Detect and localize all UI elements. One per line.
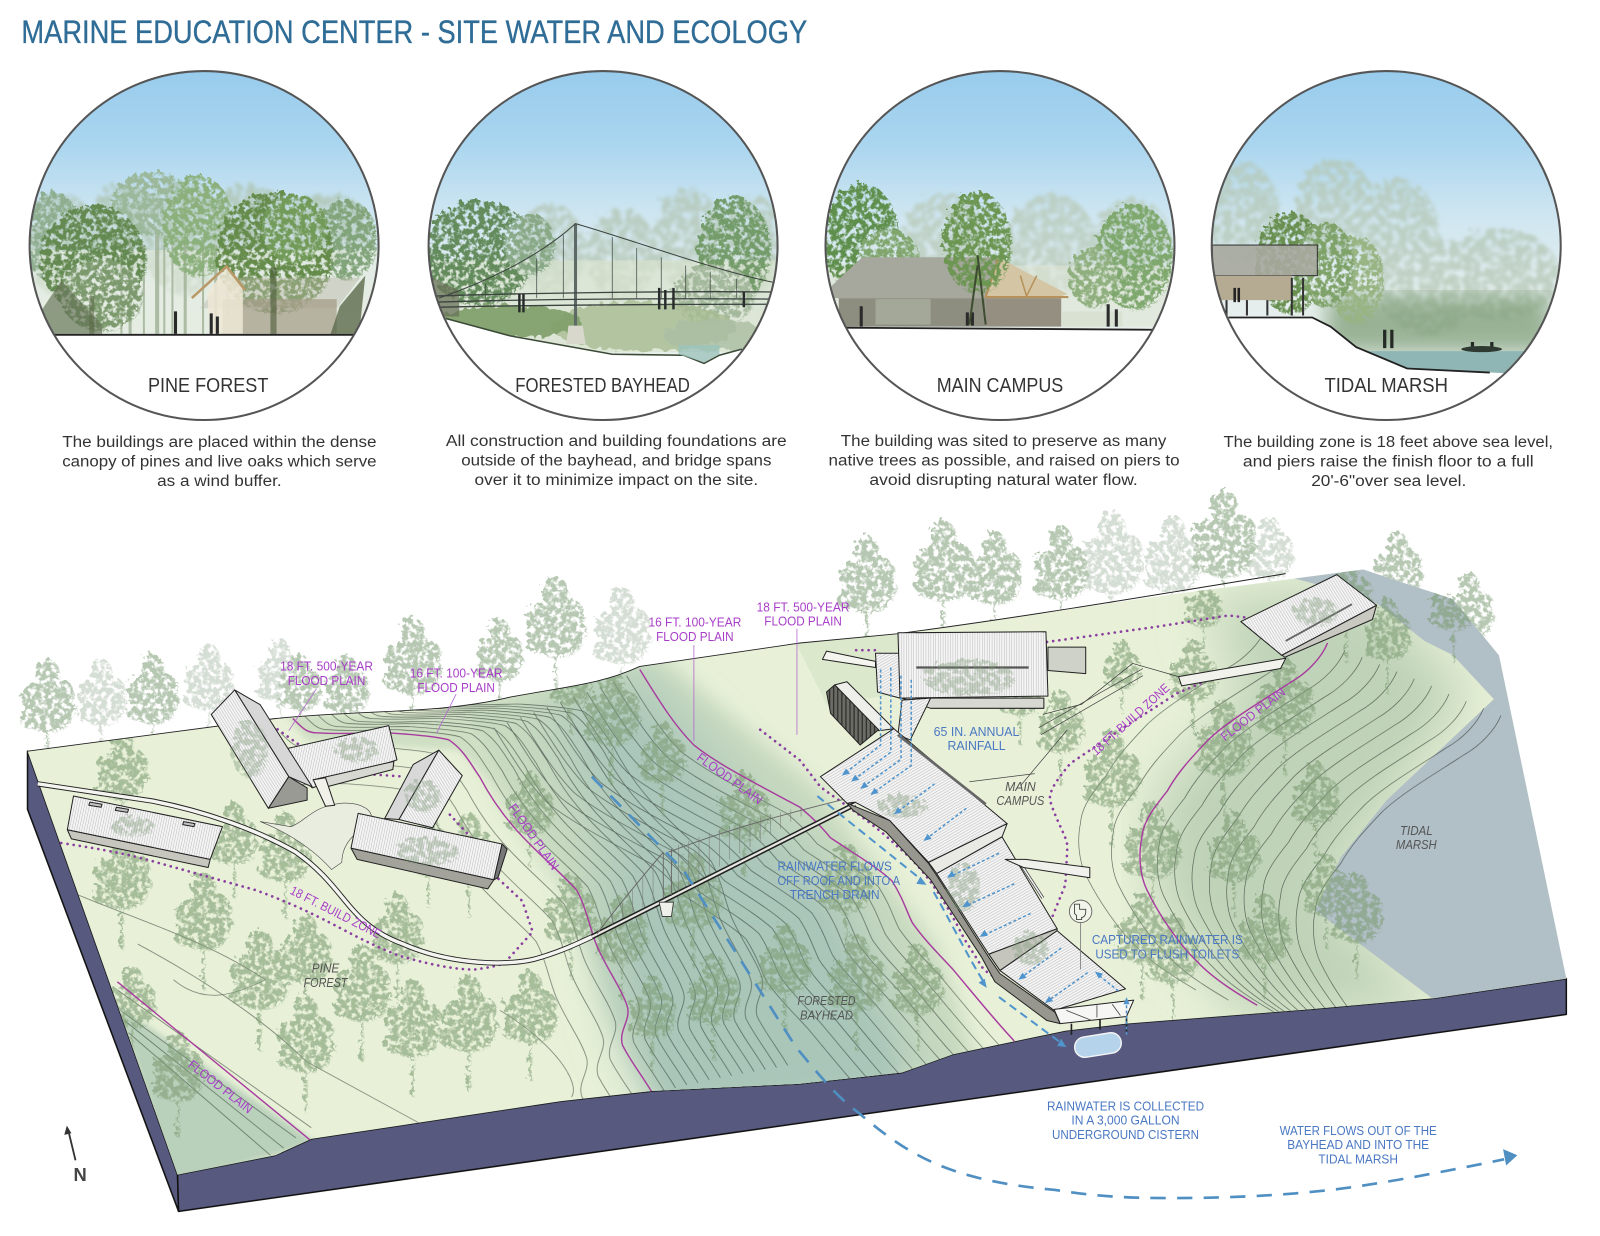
zone name labels: FORESTED xyxy=(797,993,856,1008)
blue water callouts: 65 IN. ANNUAL xyxy=(934,724,1019,739)
zone name labels: MAIN xyxy=(1005,779,1036,794)
ground cut xyxy=(848,328,1151,419)
blue water callouts xyxy=(778,724,1437,1166)
site model: terrain surface xyxy=(0,551,1600,1204)
text block: forested bayhead: over it to minimize impact on the site. xyxy=(474,472,758,489)
text block: main campus: avoid disrupting natural water flow. xyxy=(869,472,1138,489)
panel: forested bayhead vignette xyxy=(418,61,786,429)
circle outline xyxy=(1212,71,1561,420)
blue water callouts: RAINFALL xyxy=(947,738,1006,753)
main campus building xyxy=(832,257,1122,327)
purple flood plain labels: 18 FT. BUILD ZONE xyxy=(1088,680,1173,758)
panel: main campus vignette xyxy=(816,61,1184,429)
text block: main campus: The building was sited to preserve as many xyxy=(841,433,1166,450)
zone name labels: TIDAL xyxy=(1400,823,1433,838)
bridge cables xyxy=(597,798,849,934)
building: west lodge xyxy=(67,796,222,867)
zone name labels: CAMPUS xyxy=(996,793,1045,808)
purple flood plain labels: FLOOD PLAIN xyxy=(185,1057,256,1116)
purple flood plain labels: FLOOD PLAIN xyxy=(417,680,495,695)
north arrow xyxy=(64,1126,87,1185)
text block: tidal marsh xyxy=(1223,434,1553,490)
icon: toilet in circle xyxy=(1069,900,1092,970)
blue water callouts: CAPTURED RAINWATER IS xyxy=(1092,932,1243,947)
blue water callouts: TRENCH DRAIN xyxy=(790,887,880,902)
purple flood plain labels: 18 FT. 500-YEAR xyxy=(757,599,849,614)
panel: pine forest vignette xyxy=(20,61,388,429)
trench drain flow arrows xyxy=(817,796,1061,1043)
purple flood plain labels: 18 FT. BUILD ZONE xyxy=(288,883,384,941)
ground cut xyxy=(1229,318,1504,419)
text block: tidal marsh: 20'-6"over sea level. xyxy=(1311,473,1466,490)
title: MARINE EDUCATION CENTER - SITE WATER AND ECOLOGY xyxy=(21,13,807,50)
tidal marsh water xyxy=(1276,566,1571,1000)
purple flood plain labels: FLOOD PLAIN xyxy=(764,614,842,629)
zone name labels: MARSH xyxy=(1396,837,1437,852)
purple flood plain labels: FLOOD PLAIN xyxy=(288,673,365,688)
purple flood plain labels: FLOOD PLAIN xyxy=(506,801,562,873)
zone name labels: FOREST xyxy=(304,975,348,990)
text block: pine forest: The buildings are placed within the dense xyxy=(62,434,377,451)
blue water callouts: OFF ROOF AND INTO A xyxy=(778,873,900,888)
site model: front and side faces xyxy=(28,751,1566,1211)
building: northwest L-shaped hall xyxy=(211,690,397,808)
panel: tidal marsh vignette xyxy=(1204,61,1571,429)
suspension bridge xyxy=(434,224,776,327)
blue water callouts: RAINWATER FLOWS xyxy=(778,859,892,874)
ground cut xyxy=(56,336,352,419)
driveway pad xyxy=(260,803,372,870)
text block: forested bayhead xyxy=(446,433,787,489)
rainwater roof flow arrows xyxy=(846,667,1127,1035)
flood plain lines xyxy=(117,643,1328,1141)
trench drain arrowheads xyxy=(916,877,1066,1047)
label: forested bayhead: FORESTED BAYHEAD xyxy=(515,375,690,397)
purple flood plain labels: 18 FT. 500-YEAR xyxy=(280,659,373,674)
text block: main campus: native trees as possible, and raised on piers to xyxy=(829,452,1180,469)
label: tidal marsh: TIDAL MARSH xyxy=(1324,375,1448,397)
purple flood plain labels xyxy=(185,599,1288,1116)
building: long diagonal classroom wing xyxy=(820,682,1134,1035)
terrain colour zones xyxy=(117,582,1469,1184)
text block: forested bayhead: All construction and building foundations are xyxy=(446,433,787,450)
ground cut xyxy=(446,318,742,419)
purple flood plain labels: 16 FT. 100-YEAR xyxy=(648,615,741,630)
building: east pavilion xyxy=(1179,575,1377,686)
zone name labels: BAYHEAD xyxy=(800,1008,853,1023)
blue water callouts: RAINWATER IS COLLECTED xyxy=(1047,1098,1204,1113)
tree shadows over roofs xyxy=(110,598,1339,965)
roof flow arrowheads xyxy=(842,769,1130,1004)
road and suspension bridge xyxy=(38,784,855,963)
zone name labels xyxy=(304,779,1437,1023)
circle outline xyxy=(30,71,379,420)
terrain outline xyxy=(28,574,1286,751)
zone name labels: PINE xyxy=(312,961,340,976)
blue water callouts: BAYHEAD AND INTO THE xyxy=(1287,1137,1429,1152)
building: main campus hall xyxy=(822,632,1179,786)
label: pine forest: PINE FOREST xyxy=(148,375,268,397)
text block: pine forest: canopy of pines and live oaks which serve xyxy=(62,453,377,470)
circle outline xyxy=(429,71,778,420)
trees on terrain xyxy=(93,557,1479,1138)
building: central T-shaped hall xyxy=(351,750,507,889)
raised pavilion on piers xyxy=(1212,245,1317,315)
north arrow: N xyxy=(73,1164,87,1185)
purple flood plain labels: FLOOD PLAIN xyxy=(694,750,766,807)
main building facade xyxy=(41,266,365,334)
blue water callouts: UNDERGROUND CISTERN xyxy=(1052,1127,1199,1142)
text block: tidal marsh: and piers raise the finish floor to a full xyxy=(1243,453,1534,470)
blue water callouts: TIDAL MARSH xyxy=(1318,1151,1398,1166)
purple flood plain labels: FLOOD PLAIN xyxy=(1218,684,1288,744)
bayhead water flow arrow xyxy=(592,777,1517,1198)
text block: pine forest: as a wind buffer. xyxy=(157,473,282,490)
purple flood plain labels: 16 FT. 100-YEAR xyxy=(410,666,503,681)
background treeline xyxy=(20,490,1496,771)
water xyxy=(1368,351,1524,374)
18 ft build zone dotted lines xyxy=(61,615,1246,1021)
contour lines xyxy=(61,628,1501,1155)
underground cistern xyxy=(1073,1031,1123,1059)
text block: forested bayhead: outside of the bayhead, and bridge spans xyxy=(461,452,772,469)
text block: pine forest xyxy=(62,434,377,490)
blue water callouts: WATER FLOWS OUT OF THE xyxy=(1280,1123,1437,1138)
text block: main campus xyxy=(829,433,1180,489)
purple flood plain labels: FLOOD PLAIN xyxy=(656,629,734,644)
label: main campus: MAIN CAMPUS xyxy=(937,375,1063,397)
blue water callouts: IN A 3,000 GALLON xyxy=(1071,1113,1180,1128)
text block: tidal marsh: The building zone is 18 feet above sea level, xyxy=(1223,434,1553,451)
blue water callouts: USED TO FLUSH TOILETS xyxy=(1095,946,1239,961)
circle outline xyxy=(826,71,1174,420)
